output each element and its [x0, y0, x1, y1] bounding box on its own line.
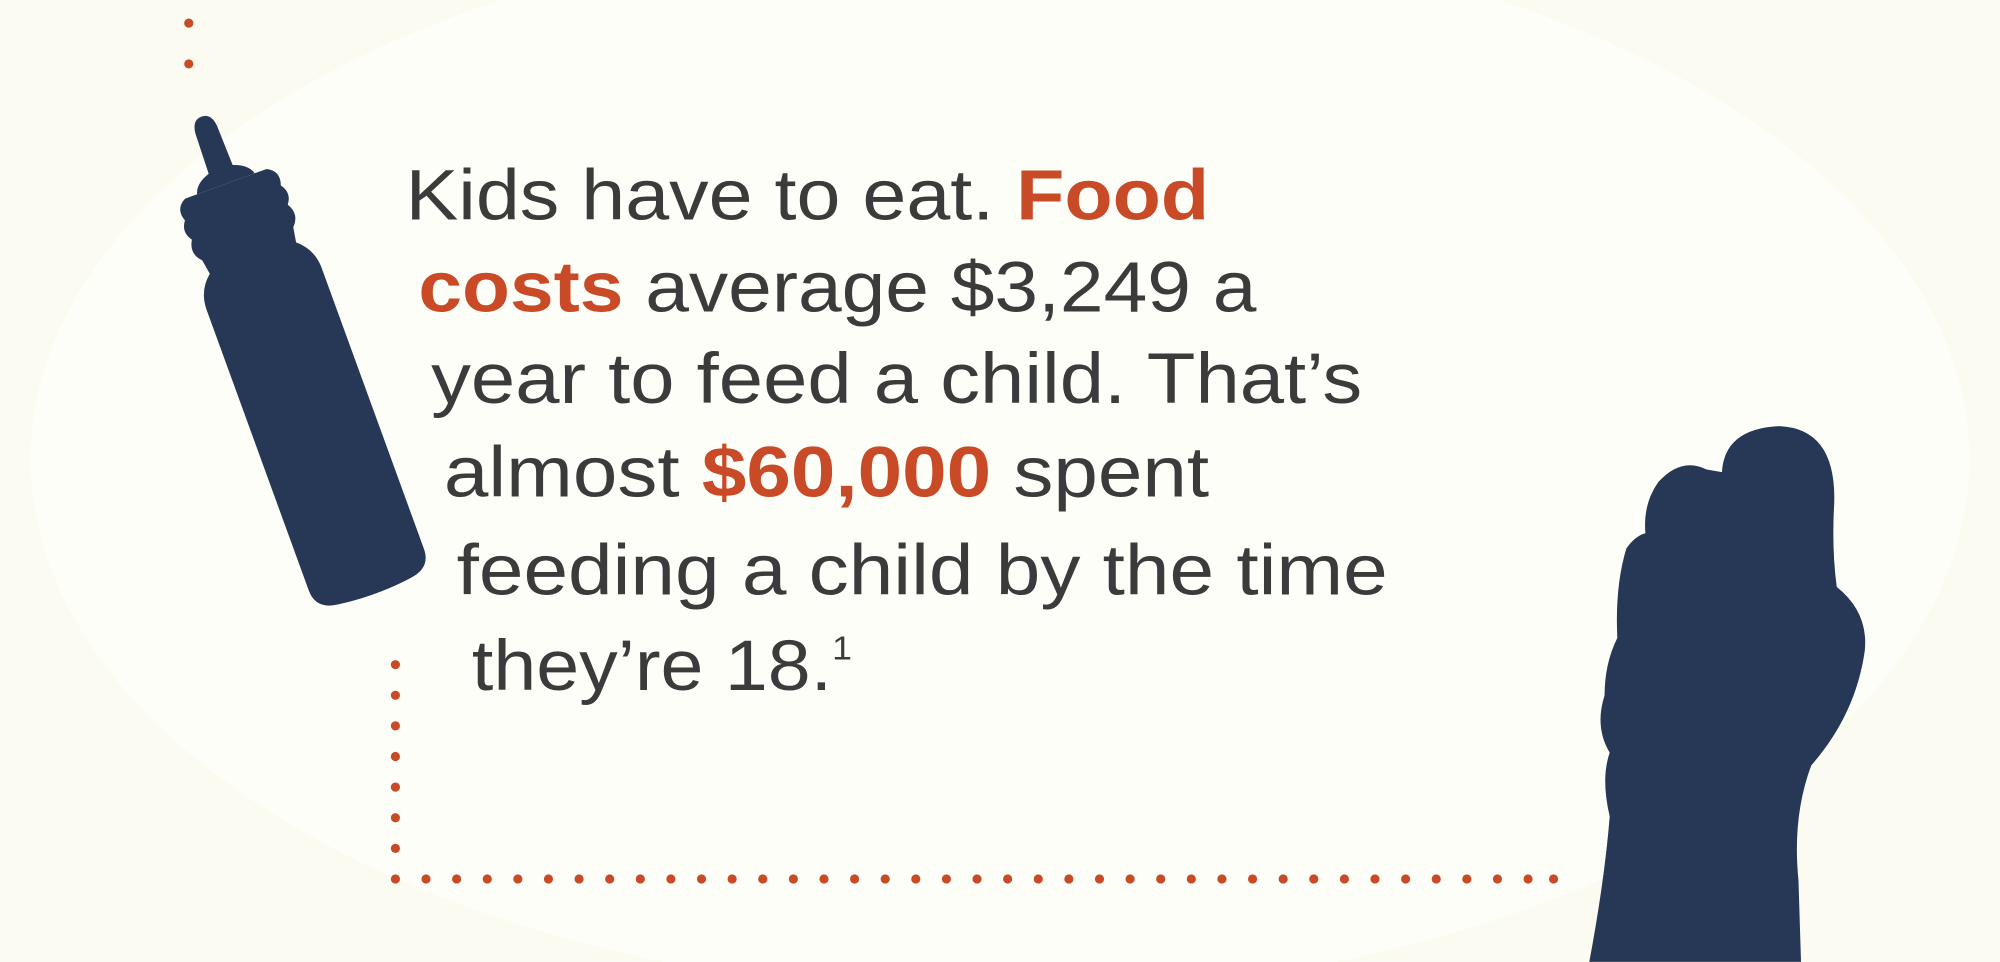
main text block: almost $60,000 spent	[444, 432, 1209, 512]
main text block: year to feed a child. That’s	[431, 339, 1362, 419]
main text block: they’re 18.	[472, 626, 805, 706]
icon: mother holding baby silhouette	[1589, 426, 1865, 962]
icon: baby bottle	[144, 96, 433, 615]
main text block: Kids have to eat. Food	[406, 156, 1209, 236]
dotted line: bottom connector	[391, 660, 1558, 884]
dotted line: top	[184, 18, 193, 69]
main text block: costs average $3,249 a	[418, 247, 1257, 327]
main text block	[406, 156, 1388, 706]
main text block: 1	[832, 631, 852, 668]
main text block: feeding a child by the time	[457, 531, 1388, 611]
